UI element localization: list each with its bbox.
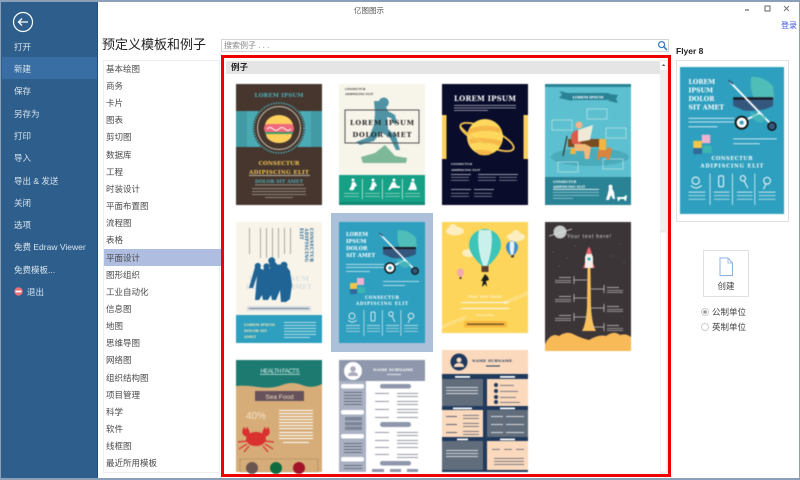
flyer 2: runner: CONSECTUR [345,87,366,91]
menu: save as: 另存为 [14,109,40,119]
preview title: Flyer 8 [676,46,703,56]
flyer 6: stroller (selected): LOREM [346,232,368,238]
preview flyer: CONSECTUR [711,156,753,162]
flyer 3: planet: ADIPISCING ELIT [450,168,481,172]
flyer 4: man on bench [545,84,631,205]
flyer 6: stroller (selected): IPSUM [346,239,367,245]
radio: imperial: 英制单位 [712,322,746,332]
icon: search [658,41,668,51]
category: mind map: 思维导图 [106,338,140,348]
flyer 6: stroller (selected): DOLOR [346,246,368,252]
flyer 8: rocket timeline: Your text here! [567,234,611,240]
category: recent templates: 最近所用模板 [106,458,157,468]
flyer 9: health facts: Sea Food [265,394,294,401]
flyer 7: hot air balloon [442,222,528,333]
category: engineering: 工程 [106,167,123,177]
flyer 9: health facts: 40% [246,411,266,422]
category: fashion design: 时装设计 [106,184,140,194]
flyer 1: hot dog: CONSECTUR [258,161,300,167]
radio: metric: 公制单位 [712,307,746,317]
menu: import: 导入 [14,153,31,163]
flyer 5: group silhouette: CONSECTUR [308,228,313,262]
preview flyer: IPSUM [688,87,713,94]
category: charts: 图表 [106,115,123,125]
window controls [745,6,790,12]
create button [703,250,749,297]
flyer 7: hot air balloon: Your text here! [468,294,502,299]
flyer 5: group silhouette: LOREM IPSUM [249,275,309,283]
flyer 5: group silhouette: AMET [243,335,257,339]
category: clipart: 剪切图 [106,132,132,142]
flyer 10: grey resume [339,360,425,472]
flyer 4: man on bench: LOREM IPSUM [572,94,604,100]
icon: exit [14,287,23,296]
flyer 11: peach resume [442,350,528,472]
preview card [676,60,789,222]
flyer 4: man on bench: ADIPISCING ELIT [552,185,586,189]
category: business: 商务 [106,81,123,91]
red highlight frame [222,56,670,476]
search box [221,39,669,52]
category: wireframe: 线框图 [106,441,132,451]
menu: exit: 退出 [27,287,44,297]
category: graphic organizer: 图形组织 [106,270,140,280]
menu: free templates: 免费模板... [14,265,55,275]
flyer 4: man on bench: CONSECTUR [553,180,577,184]
flyer 3: planet [442,84,528,205]
flyer 5: group silhouette: DOLOR SIT [244,329,267,333]
flyer 5: group silhouette: DOLOR SIT AMET [246,283,312,291]
scrollbar [660,60,668,474]
flyer 6: stroller (selected): CONSECTUR [365,295,400,300]
flyer 7: hot air balloon: Your text here [476,313,495,317]
preview flyer: DOLOR [688,96,715,103]
flyer 9: health facts [236,360,322,474]
flyer 2: runner: DOLOR AMET [352,131,412,139]
category: cards: 卡片 [106,98,123,108]
menu: print: 打印 [14,131,31,141]
sidebar [0,0,98,480]
selected category highlight [104,249,221,266]
selected thumbnail highlight [331,213,433,352]
category: science: 科学 [106,407,123,417]
flyer 11: peach resume: NAME SURNAME [472,358,512,363]
menu: save: 保存 [14,86,31,96]
category: forms: 表格 [106,235,123,245]
flyer 2: runner [339,84,425,205]
category: org chart: 组织结构图 [106,373,149,383]
back button icon [12,12,34,32]
category: graphic design: 平面设计 [106,253,140,263]
flyer 3: planet: LOREM IPSUM [454,94,516,103]
icon: new document [720,258,733,276]
menu: close: 关闭 [14,198,31,208]
window title: 亿图图示 [354,6,384,15]
category: floor plan: 平面布置图 [106,201,149,211]
search box: 搜索例子 . . . [224,41,269,50]
flyer 6: stroller (selected): ADIPISCING ELIT [355,301,409,306]
flyer 6: stroller (selected) [339,222,425,343]
menu: new: 新建 [14,64,31,74]
flyer 5: group silhouette: ELIT [298,228,303,240]
examples header bar: 例子 [231,62,248,72]
preview flyer: SIT AMET [688,104,724,111]
flyer 2: runner: ADIPISCING ELIT [344,92,374,96]
category: basic drawing: 基本绘图 [106,64,140,74]
selected menu highlight [2,57,97,79]
preview flyer [679,66,785,215]
flyer 6: stroller (selected): SIT AMET [346,253,376,259]
flyer 8: rocket timeline [545,222,631,351]
heading: 预定义模板和例子 [102,37,206,52]
flyer 9: health facts: HEALTH FACTS [260,369,300,375]
menu: open: 打开 [14,42,31,52]
category: industrial automation: 工业自动化 [106,287,149,297]
panel: category list [103,60,220,473]
category: infographic: 信息图 [106,304,132,314]
category: database: 数据库 [106,150,132,160]
flyer 1: hot dog: LOREM IPSUM [254,93,304,99]
category: software: 软件 [106,424,123,434]
login link: 登录 [781,21,797,30]
flyer 1: hot dog [236,84,322,205]
menu: options: 选项 [14,220,31,230]
flyer 1: hot dog: DOLOR SIT AMET [255,179,304,185]
menu: free viewer: 免费 Edraw Viewer [14,242,86,252]
preview flyer: ADIPISCING ELIT [700,163,764,169]
create label: 创建 [717,281,734,291]
flyer 2: runner: LOREM IPSUM [350,119,414,127]
flyer 10: grey resume: NAME SURNAME [373,367,413,372]
category: network: 网络图 [106,355,132,365]
category: maps: 地图 [106,321,123,331]
category: project management: 项目管理 [106,390,140,400]
menu: export and send: 导出 & 发送 [14,176,58,186]
examples header bar [226,61,660,74]
category: flowchart: 流程图 [106,218,132,228]
preview flyer: LOREM [688,79,715,86]
flyer 5: group silhouette: ADIPISCING [303,227,308,262]
flyer 5: group silhouette: LOREM IPSUM [244,323,275,327]
flyer 1: hot dog: ADIPISCING ELIT [248,170,310,176]
flyer 3: planet: CONSECTUR [451,162,473,166]
flyer 5: group silhouette [236,222,322,343]
